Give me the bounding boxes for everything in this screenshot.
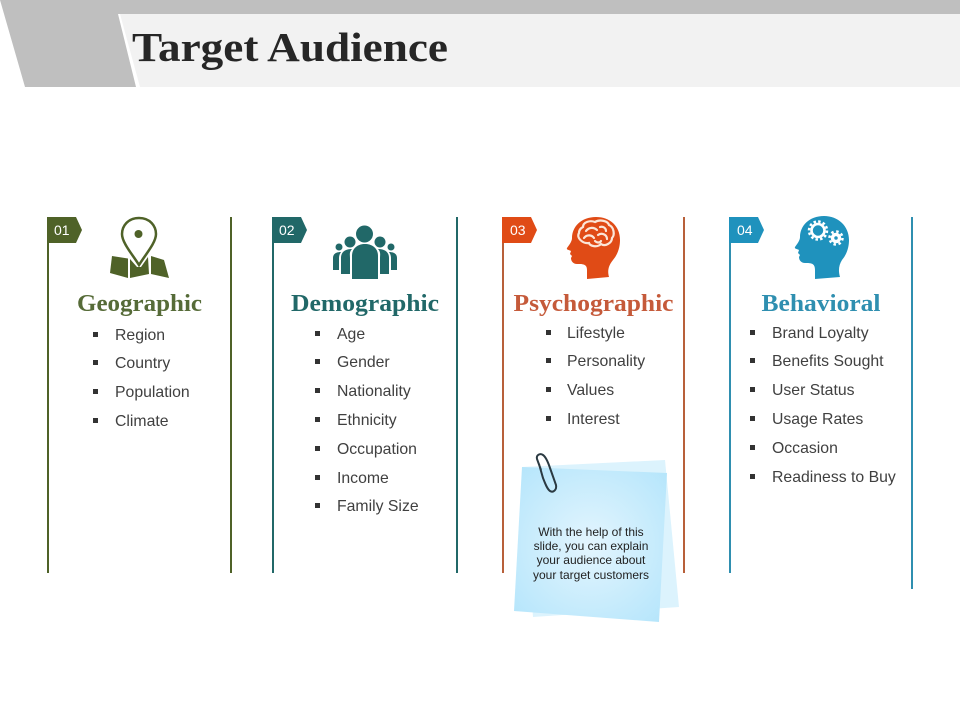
- header band: [0, 0, 960, 87]
- back sheet: [522, 460, 679, 617]
- heading: Psychographic: Psychographic: [514, 291, 674, 317]
- heading: Demographic: Demographic: [291, 291, 439, 317]
- sticky note callout: [514, 454, 679, 622]
- icon: head with gears: [795, 216, 849, 279]
- note text: your target customers: [533, 568, 649, 582]
- tag 02: 02: [279, 222, 295, 238]
- list: demographic items: Occupation: [337, 441, 417, 458]
- list: behavioral items: Occasion: [772, 440, 838, 457]
- list: psychographic items: Values: [567, 382, 614, 399]
- tag 04: 04: [737, 222, 753, 238]
- list: geographic items: Country: [115, 355, 170, 372]
- list: geographic items: Climate: [115, 413, 169, 430]
- icon: people group: [333, 226, 397, 279]
- list: behavioral items: Usage Rates: [772, 411, 863, 428]
- tag 02: [272, 217, 307, 243]
- list: behavioral items: Benefits Sought: [772, 353, 884, 370]
- gears: [809, 222, 842, 244]
- tag 01: [47, 217, 82, 243]
- title: Target Audience: [132, 24, 448, 70]
- tag 01: 01: [54, 222, 70, 238]
- heading: Behavioral: Behavioral: [762, 291, 881, 317]
- list: psychographic items: Interest: [567, 411, 620, 428]
- list: behavioral items: Readiness to Buy: [772, 469, 896, 486]
- note text: your audience about: [537, 553, 646, 567]
- note text: [533, 525, 649, 582]
- panel: geographic: [47, 217, 232, 573]
- panel: demographic: [272, 217, 458, 573]
- list: demographic items: Income: [337, 470, 389, 487]
- icon: paperclip: [537, 454, 556, 492]
- list: geographic items: Population: [115, 384, 190, 401]
- front sheet: [514, 467, 667, 622]
- list: demographic items: Ethnicity: [337, 412, 397, 429]
- panel: psychographic: [502, 217, 685, 573]
- list: demographic items: Gender: [337, 354, 390, 371]
- list: behavioral items: User Status: [772, 382, 855, 399]
- tag 03: 03: [510, 222, 526, 238]
- panel: behavioral: [729, 216, 913, 589]
- tag 03: [502, 217, 537, 243]
- list: demographic items: [315, 326, 419, 515]
- list: behavioral items: Brand Loyalty: [772, 325, 869, 342]
- list: demographic items: Nationality: [337, 383, 411, 400]
- list: demographic items: Age: [337, 326, 365, 343]
- heading: Geographic: Geographic: [77, 291, 202, 317]
- tag 04: [729, 217, 764, 243]
- list: psychographic items: Lifestyle: [567, 325, 625, 342]
- list: geographic items: Region: [115, 327, 165, 344]
- list: psychographic items: Personality: [567, 353, 645, 370]
- icon: map pin: [110, 218, 169, 278]
- list: behavioral items: [750, 325, 896, 486]
- list: demographic items: Family Size: [337, 498, 419, 515]
- brain: [578, 221, 614, 246]
- note text: With the help of this: [538, 525, 644, 539]
- icon: head with brain: [567, 217, 620, 279]
- note text: slide, you can explain: [534, 539, 648, 553]
- list: geographic items: [93, 327, 190, 430]
- list: psychographic items: [546, 325, 645, 428]
